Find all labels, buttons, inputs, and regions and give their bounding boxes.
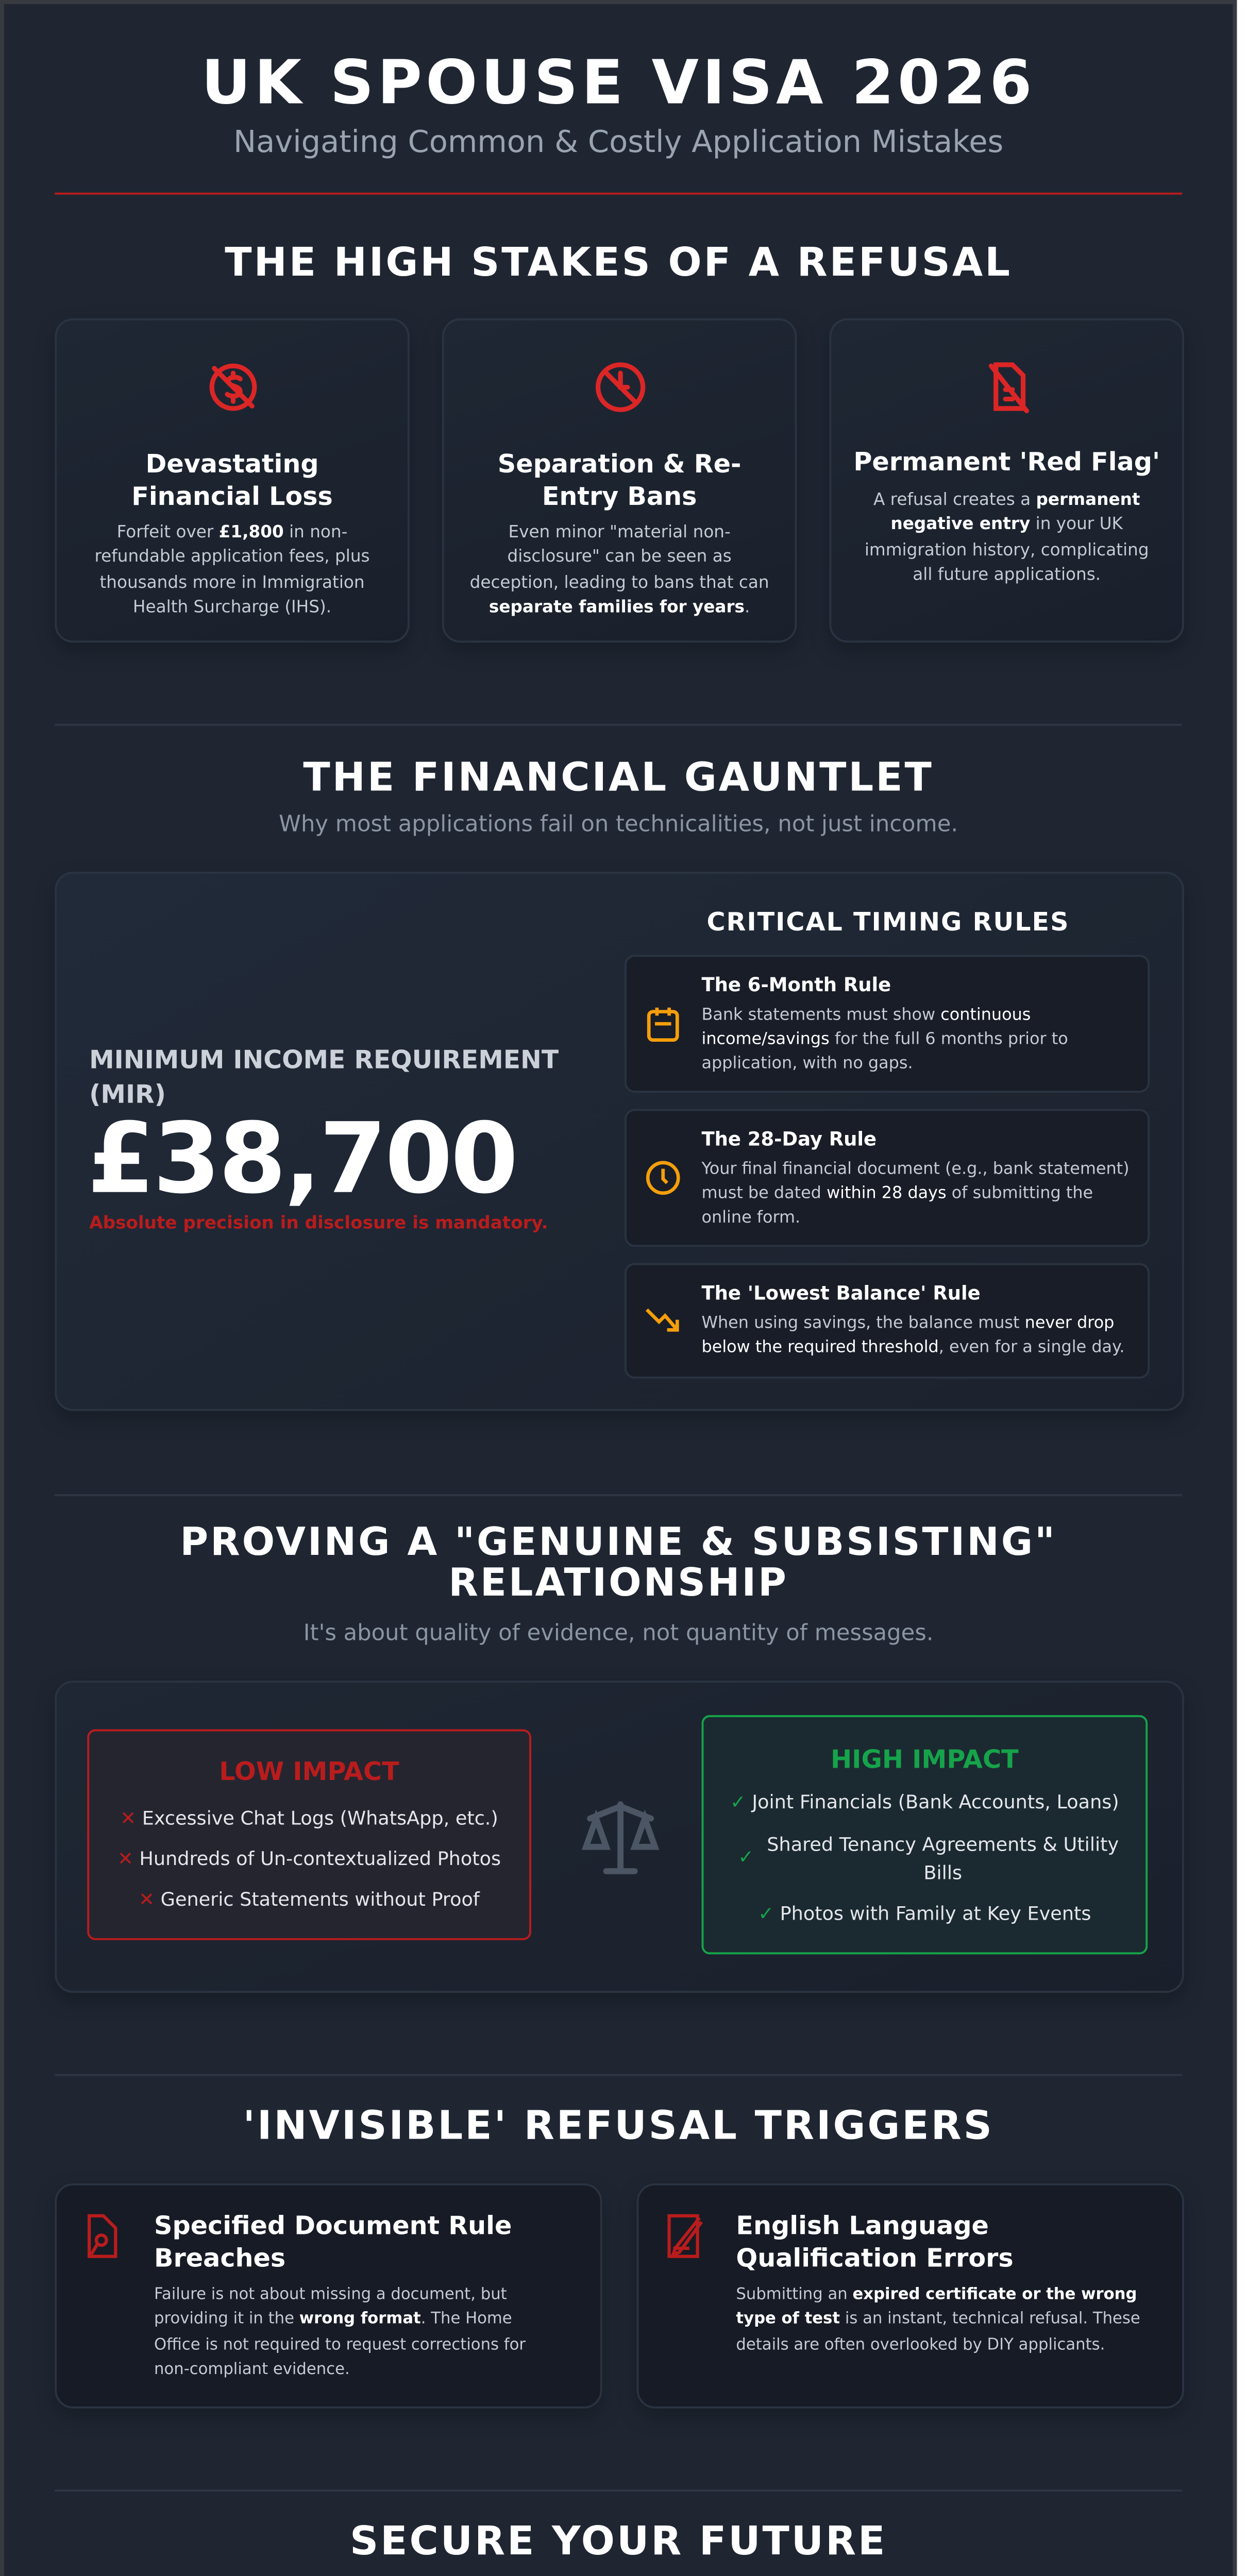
rule: lowest balance: [625, 1263, 1150, 1379]
high impact box: ✓: [738, 1847, 754, 1869]
rule: 28 day: online form.: [702, 1207, 800, 1227]
card: english language: details are often overlooked by DIY applicants.: [736, 2335, 1105, 2353]
high impact box: ✓ Joint Financials (Bank Accounts, Loans): [730, 1792, 1119, 1815]
subtitle: Navigating Common & Costly Application Mistakes: [233, 124, 1003, 160]
card text: Even minor "material non-: [509, 521, 731, 541]
card: separation: [442, 318, 797, 642]
card title: Separation & Re-: [498, 448, 741, 479]
card: document rule: providing it in the wrong format. The Home: [154, 2310, 512, 2328]
card: english language: Submitting an expired certificate or the wrong: [736, 2285, 1137, 2303]
low impact box: LOW IMPACT: [219, 1756, 399, 1786]
rule: 6 month: application, with no gaps.: [702, 1053, 913, 1073]
big number: £38,700: [87, 1103, 516, 1216]
subheading: It's about quality of evidence, not quantity of messages.: [304, 1620, 934, 1646]
card text: deception, leading to bans that can: [470, 571, 769, 591]
rule: 28 day: must be dated within 28 days of submitting the: [702, 1182, 1093, 1202]
card: english language: Qualification Errors: [736, 2242, 1014, 2273]
card: document rule: Breaches: [154, 2242, 285, 2273]
icon: file edit: [667, 2214, 703, 2258]
rule: lowest balance: The 'Lowest Balance' Rule: [702, 1283, 981, 1306]
low impact box: ✕ Hundreds of Un-contextualized Photos: [117, 1849, 501, 1871]
card: english language: English Language: [736, 2210, 989, 2240]
card: english language: type of test is an instant, technical refusal. These: [736, 2310, 1140, 2328]
rule: lowest balance: When using savings, the balance must never drop: [702, 1312, 1114, 1332]
card text: [865, 488, 1149, 584]
card: english language: [637, 2183, 1184, 2409]
icon: file banned: [988, 362, 1029, 413]
heading: invisible triggers: 'INVISIBLE' REFUSAL TRIGGERS: [243, 2103, 994, 2149]
card text: separate families for years.: [489, 596, 750, 616]
rule: 28 day: The 28-Day Rule: [702, 1129, 877, 1151]
rule: lowest balance: below the required threshold, even for a single day.: [702, 1336, 1125, 1357]
icon: clock banned: [596, 362, 645, 412]
card text: immigration history, complicating: [865, 538, 1149, 558]
card: document rule: Specified Document Rule: [154, 2210, 512, 2240]
icon: scales: [582, 1801, 660, 1874]
card text: Health Surcharge (IHS).: [133, 596, 331, 616]
heading: relationship: [180, 1520, 1057, 1606]
card text: refundable application fees, plus: [94, 546, 370, 566]
card text: Forfeit over £1,800 in non-: [117, 521, 347, 541]
heading: relationship: RELATIONSHIP: [448, 1561, 788, 1606]
card: red flag: [829, 318, 1184, 642]
panel: financial: [55, 872, 1184, 1411]
heading: secure: SECURE YOUR FUTURE: [350, 2518, 887, 2565]
rule: 28 day: [625, 1109, 1150, 1247]
heading: relationship: PROVING A "GENUINE & SUBSISTING": [180, 1520, 1057, 1565]
red note: Absolute precision in disclosure is mandatory.: [89, 1214, 548, 1234]
panel: evidence: [55, 1681, 1184, 1993]
card text: thousands more in Immigration: [99, 571, 365, 591]
rule: 6 month: [625, 955, 1150, 1093]
icon: clock: [646, 1161, 680, 1195]
card text: [470, 521, 769, 616]
low impact box: ✕ Excessive Chat Logs (WhatsApp, etc.): [120, 1808, 498, 1831]
icon: calendar: [647, 1008, 679, 1042]
title: UK SPOUSE VISA 2026: [201, 48, 1036, 120]
rule: 28 day: Your final financial document (e.g., bank statement): [702, 1158, 1130, 1178]
icon: trending down: [646, 1309, 679, 1332]
heading: financial gauntlet: THE FINANCIAL GAUNTLET: [303, 754, 934, 801]
card title: Financial Loss: [131, 481, 333, 511]
card text: disclosure" can be seen as: [508, 546, 732, 566]
card: document rule: non-compliant evidence.: [154, 2360, 350, 2378]
card text: all future applications.: [913, 563, 1101, 584]
card title: [131, 448, 333, 511]
high impact box: [702, 1715, 1148, 1954]
card: document rule: Failure is not about missing a document, but: [154, 2285, 507, 2303]
card text: A refusal creates a permanent: [873, 488, 1140, 509]
rule: 6 month: income/savings for the full 6 months prior to: [702, 1028, 1068, 1048]
MIR label: MINIMUM INCOME REQUIREMENT (MIR): [89, 1044, 559, 1108]
card title: [498, 448, 741, 511]
card: document rule: [55, 2183, 602, 2409]
card title: Devastating: [146, 448, 319, 479]
card title: Entry Bans: [542, 481, 697, 511]
icon: no money: [209, 364, 257, 411]
icon: file search: [88, 2214, 117, 2258]
rule: 6 month: The 6-Month Rule: [702, 975, 891, 997]
low impact box: [87, 1730, 531, 1940]
card: document rule: Office is not required to request corrections for: [154, 2335, 526, 2353]
heading: high stakes: THE HIGH STAKES OF A REFUSAL: [225, 239, 1012, 286]
timing heading: CRITICAL TIMING RULES: [706, 906, 1070, 937]
rule: 6 month: Bank statements must show continuous: [702, 1004, 1031, 1024]
subheading: Why most applications fail on technicalities, not just income.: [279, 811, 958, 837]
high impact box: ✓ Photos with Family at Key Events: [758, 1904, 1091, 1926]
card text: negative entry in your UK: [891, 514, 1123, 534]
high impact box: Shared Tenancy Agreements & Utility: [767, 1835, 1119, 1857]
card title: Permanent 'Red Flag': [853, 446, 1160, 477]
card text: [94, 521, 370, 616]
high impact box: HIGH IMPACT: [831, 1743, 1019, 1774]
low impact box: ✕ Generic Statements without Proof: [139, 1889, 480, 1912]
card: financial loss: [55, 318, 410, 642]
high impact box: Bills: [923, 1863, 962, 1886]
